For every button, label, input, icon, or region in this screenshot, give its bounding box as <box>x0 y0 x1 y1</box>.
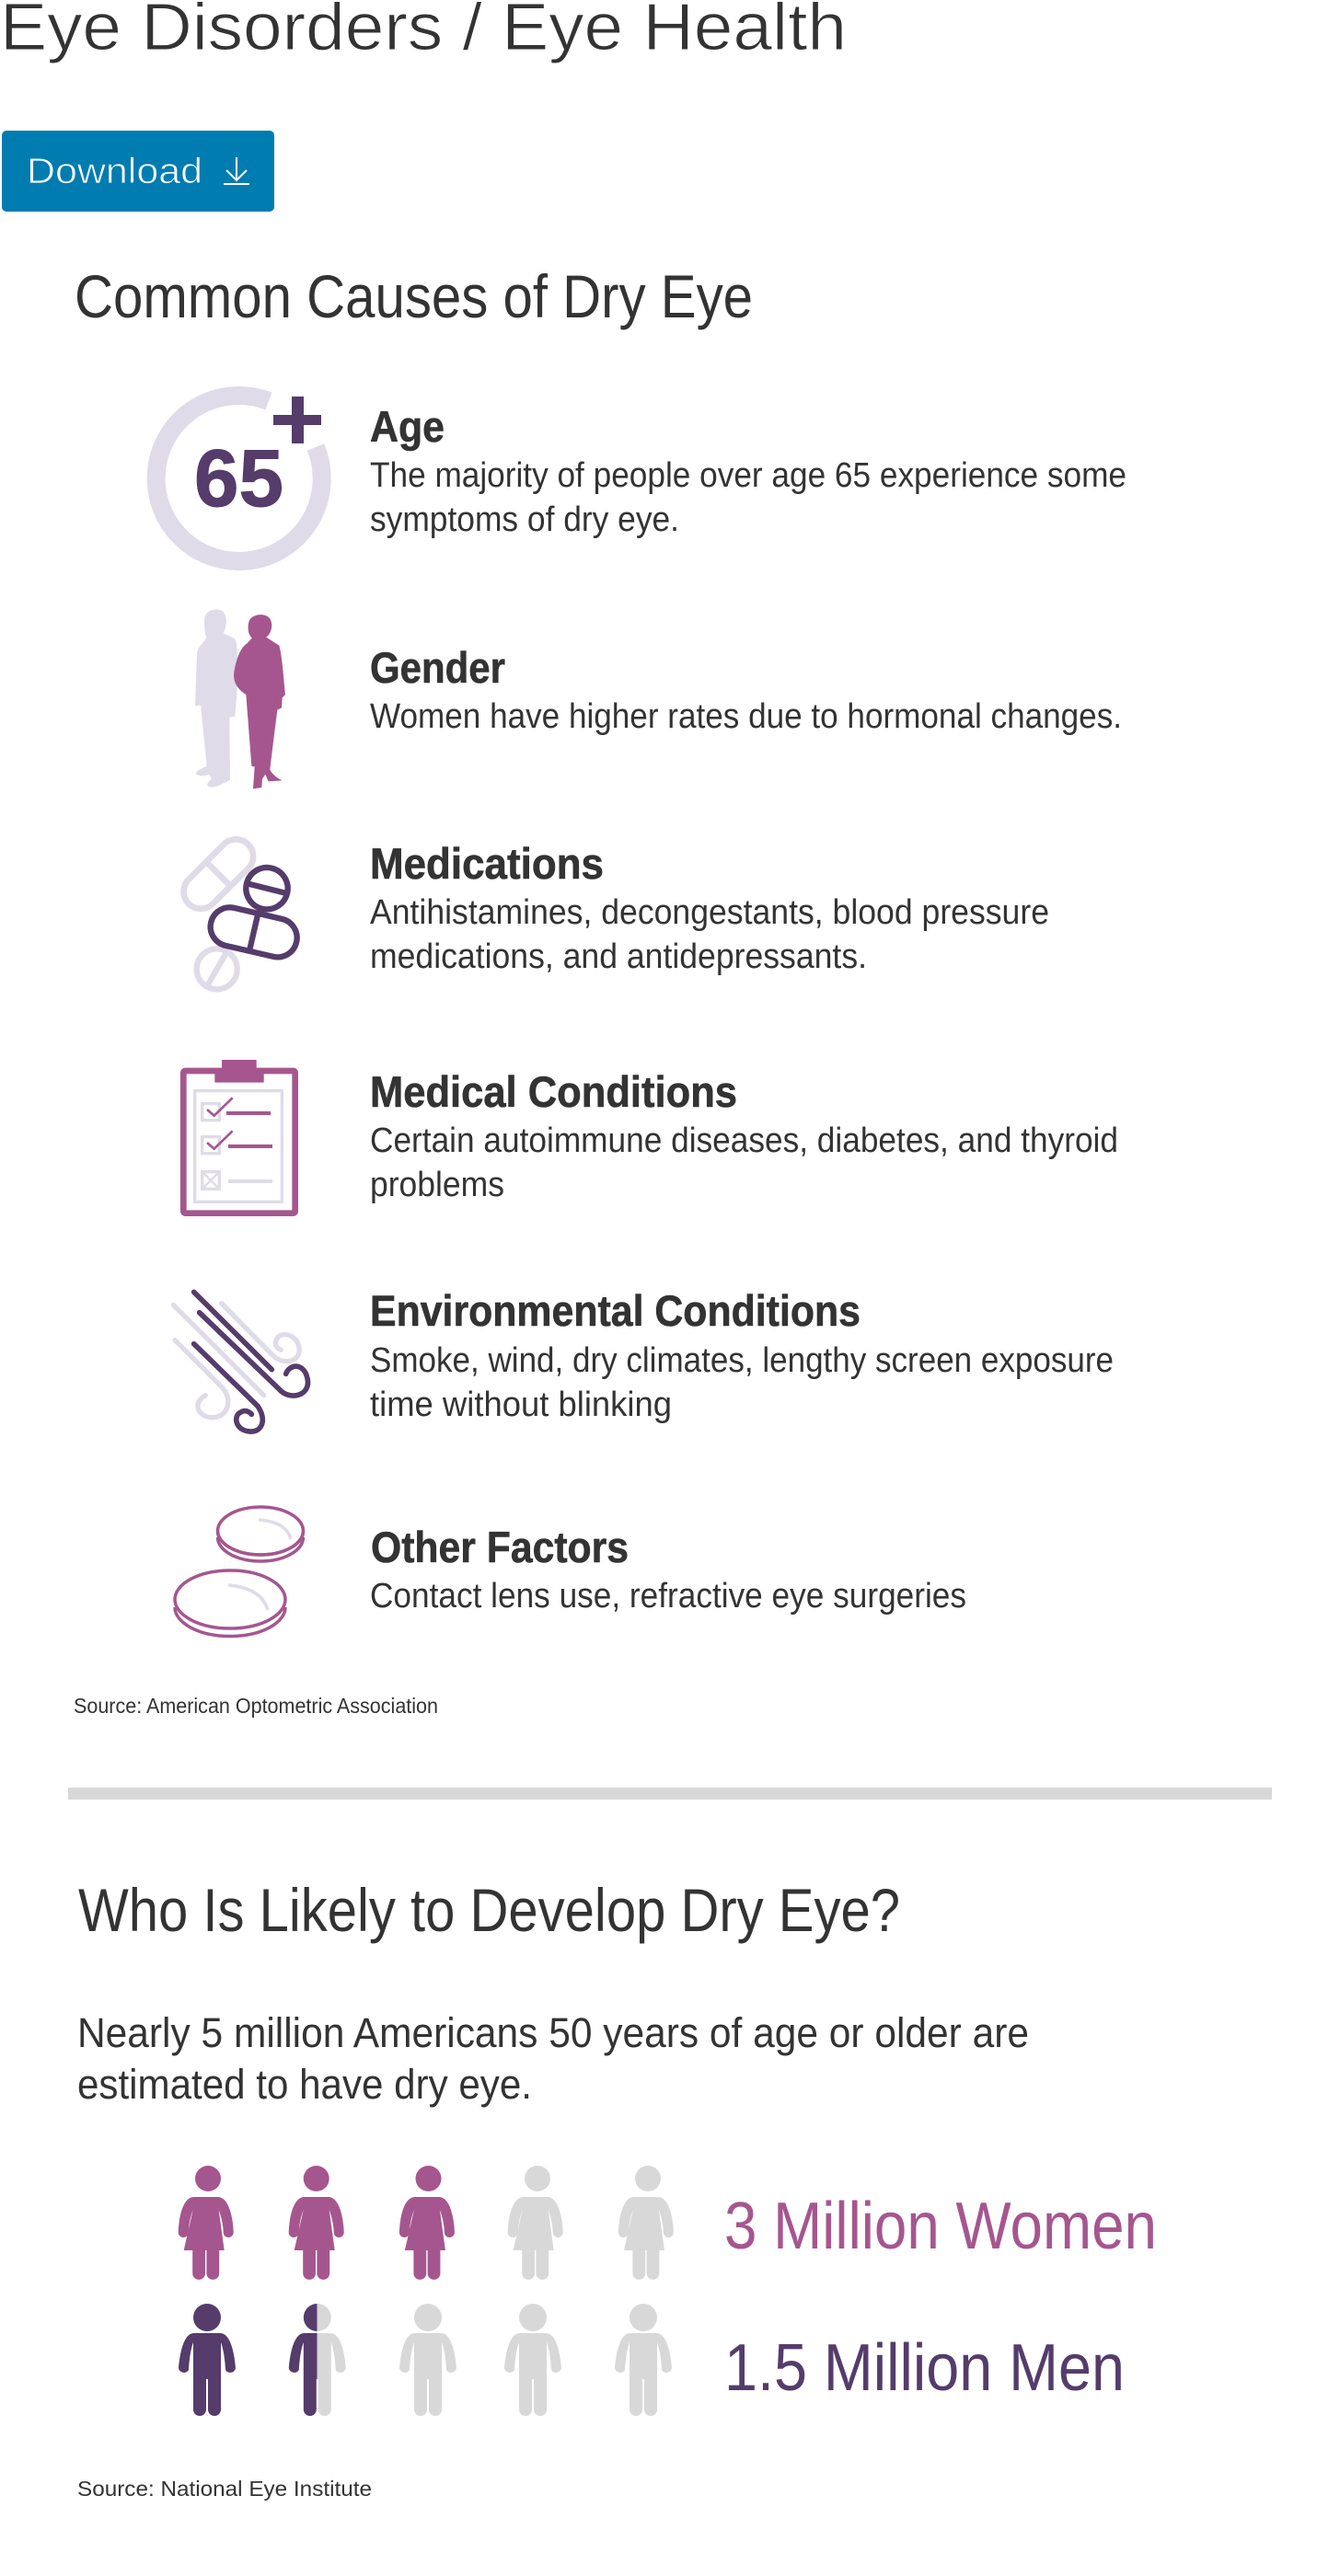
cause: medications <box>177 833 1049 996</box>
source: american optometric association: Source: American Optometric Association <box>74 1694 438 1718</box>
text: environmental conditions description: time without blinking <box>370 1386 672 1424</box>
text: medications description: medications, and antidepressants. <box>370 937 867 976</box>
label: 3 million women: 3 Million Women <box>724 2190 1157 2263</box>
icon: 65 plus <box>156 396 322 561</box>
icon: download arrow <box>224 157 249 184</box>
text: environmental conditions description: Smoke, wind, dry climates, lengthy screen exposure <box>370 1341 1114 1380</box>
icon: clipboard checklist <box>183 1060 295 1213</box>
text: gender description: Women have higher rates due to hormonal changes. <box>370 697 1122 736</box>
panel: common causes of dry eye <box>74 262 1126 1718</box>
download button <box>2 131 274 212</box>
text: intro paragraph: estimated to have dry eye. <box>77 2061 532 2108</box>
text: medical conditions description <box>370 1121 1118 1204</box>
text: age description: The majority of people over age 65 experience some <box>370 456 1126 495</box>
download button: Download <box>27 152 202 191</box>
heading: medications: Medications <box>370 839 604 888</box>
icon: man and woman silhouettes <box>195 609 285 788</box>
heading: gender: Gender <box>370 643 505 692</box>
cause: other factors <box>175 1507 966 1637</box>
text: age description <box>370 456 1126 539</box>
panel: who is likely to develop dry eye <box>77 1876 1157 2501</box>
heading: who is likely: Who Is Likely to Develop Dry Eye? <box>78 1876 900 1944</box>
text: intro paragraph: Nearly 5 million Americans 50 years of age or older are <box>77 2009 1029 2056</box>
pictogram: women row <box>179 2166 674 2280</box>
heading: other factors: Other Factors <box>371 1523 629 1571</box>
text: medical conditions description: problems <box>370 1166 504 1204</box>
icon: wind <box>173 1292 308 1432</box>
pictogram: men row <box>179 2304 672 2416</box>
heading: environmental conditions: Environmental Conditions <box>370 1286 861 1335</box>
text: environmental conditions description <box>370 1341 1114 1424</box>
heading: medical conditions: Medical Conditions <box>370 1067 737 1116</box>
icon: contact lenses <box>175 1507 304 1637</box>
text: medications description: Antihistamines, decongestants, blood pressure <box>370 893 1049 932</box>
icon: 65 plus: 65 <box>194 432 283 523</box>
text: age description: symptoms of dry eye. <box>370 500 679 539</box>
cause: medical conditions <box>183 1060 1118 1213</box>
cause: gender <box>195 609 1122 788</box>
icon: pills <box>177 833 301 996</box>
heading: common causes: Common Causes of Dry Eye <box>75 262 753 330</box>
heading: age: Age <box>370 402 445 451</box>
cause: environmental conditions <box>173 1286 1114 1432</box>
text: medical conditions description: Certain autoimmune diseases, diabetes, and thyroid <box>370 1121 1118 1160</box>
text: intro paragraph <box>77 2009 1029 2108</box>
source: national eye institute: Source: National Eye Institute <box>77 2477 372 2501</box>
text: other factors description: Contact lens use, refractive eye surgeries <box>370 1577 966 1616</box>
cause: age <box>156 396 1126 561</box>
text: medications description <box>370 893 1049 976</box>
label: 1.5 million men: 1.5 Million Men <box>724 2331 1125 2405</box>
